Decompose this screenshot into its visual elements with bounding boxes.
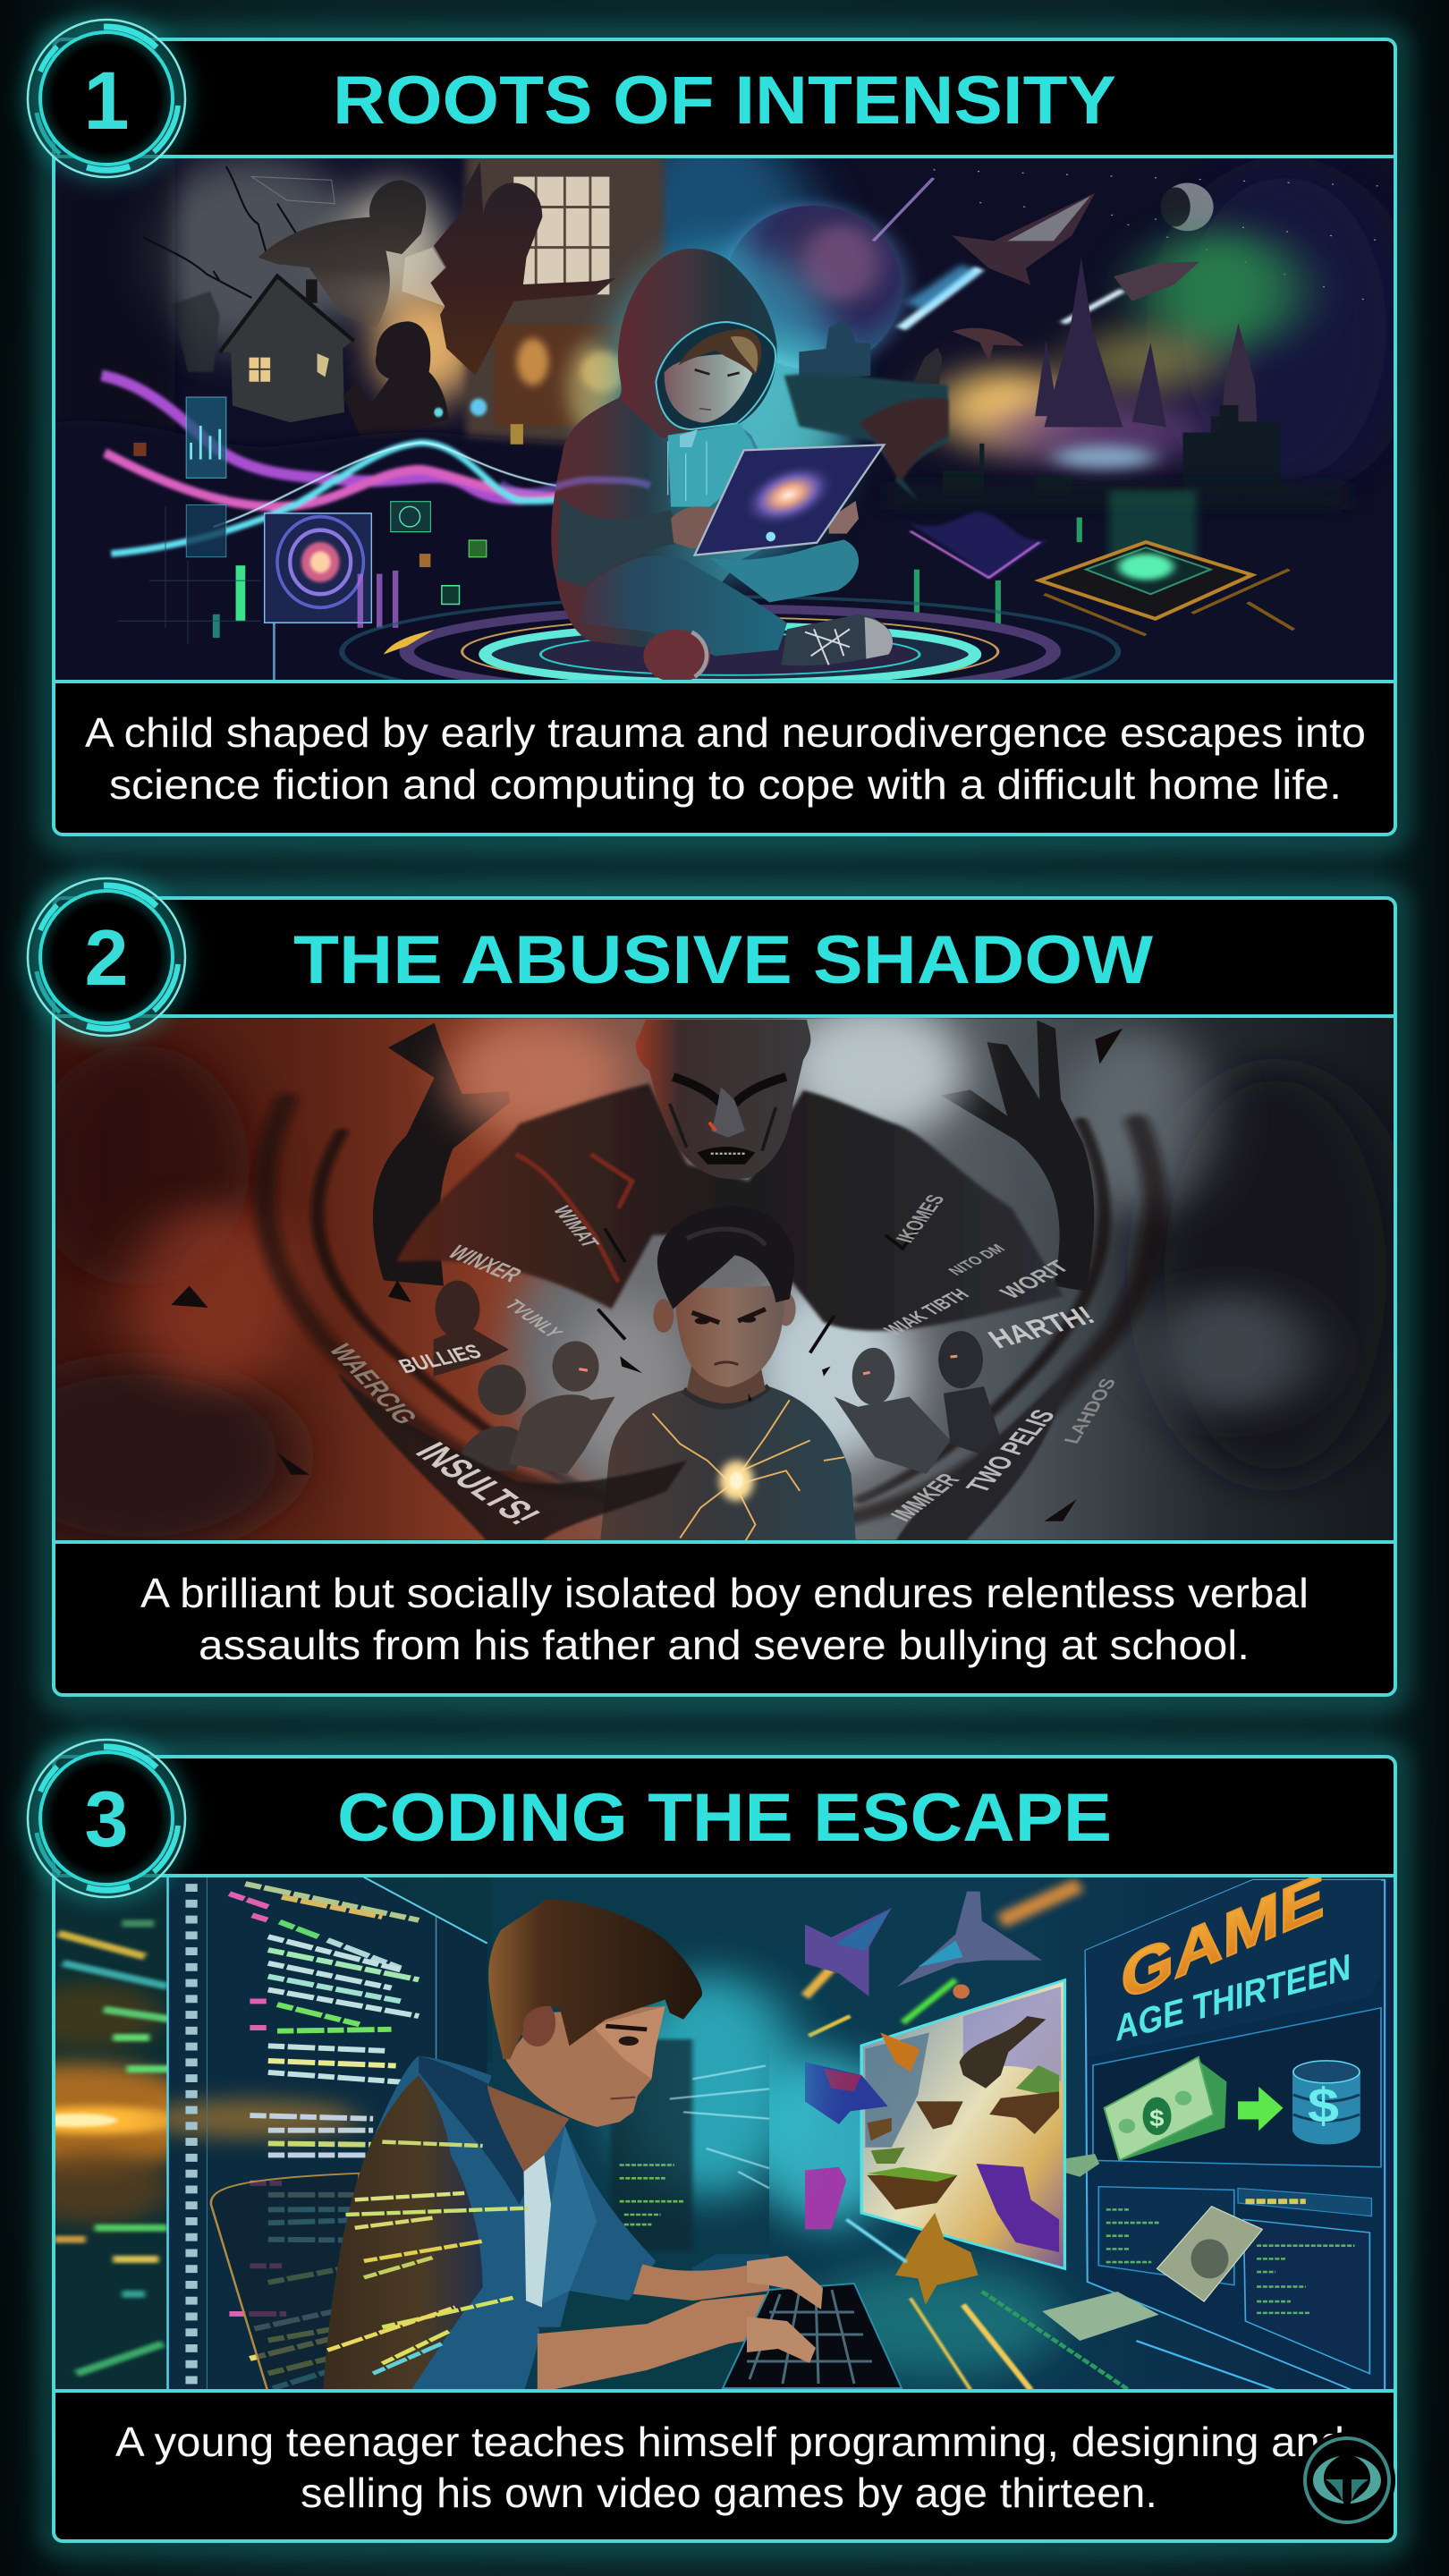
keyboard [723,2284,902,2388]
insult words: NITO DM [945,1241,1009,1278]
heading 3: CODING THE ESCAPE [337,1780,1112,1856]
heading 1: ROOTS OF INTENSITY [333,63,1116,139]
heading 2: THE ABUSIVE SHADOW [293,922,1153,998]
panel frame 1 [54,39,1395,835]
insult words: BULLIES [394,1340,486,1377]
caption box 3 [55,2391,1394,2539]
insult words: WAERCIG [321,1341,424,1428]
left light streaks [54,1874,170,2393]
insult words: WIAK TIBTH [879,1286,974,1339]
shadow swirl arcs [265,1099,1155,1521]
planet [721,204,906,370]
hair [488,1900,702,2059]
father face [636,1020,810,1179]
chair [211,2174,360,2393]
sleeve [557,495,680,588]
desk light streaks [846,2219,1284,2393]
debris [171,1029,1123,1521]
arrow [1238,2087,1284,2131]
panel 1: roots of intensity [24,16,1404,835]
floor rings [342,597,1118,707]
tablet [695,445,884,555]
number badge 1 [24,16,189,181]
face [665,354,758,423]
insult words: INSULTS! [406,1437,550,1530]
money stack [1105,2057,1226,2160]
neck [487,2086,570,2172]
text block 3 [115,2419,1344,2516]
game world and revenue panels: AGE THIRTEEN [1115,1945,1351,2049]
shadow band with insults [338,1373,687,1547]
exhaust streaks [1001,1885,1080,1921]
text block 1: A child shaped by early trauma and neurodivergence escapes into [85,709,1366,756]
sci-fi world on the right [591,121,1404,682]
father and boy figures [338,1003,1071,1547]
sci-fi city [943,258,1284,485]
insult words: IKOMES [890,1192,950,1245]
facial features [606,2026,647,2029]
hoodie [323,2055,656,2393]
text block 2: assaults from his father and severe bullying at school. [199,1622,1250,1668]
head [505,2006,665,2127]
game screen [861,1980,1064,2268]
icon: corner logo [1299,2432,1395,2529]
ships and creatures [805,1892,1042,2305]
illustration 1: child with tablet between trauma and sci-fi worlds [55,158,1394,680]
cracks glowing [653,1400,844,1547]
insult words: TWO PELIS [961,1407,1063,1496]
code reflected on the sleeve [327,2142,529,2374]
microchip [1039,490,1293,635]
insult words: WORIT [994,1256,1075,1302]
dark lower field [54,157,175,684]
code panel [140,1877,529,2393]
headline on the panel: GAME [1122,1859,1325,2015]
illustration 2: boy under towering shadow father with bullies [0,1003,1404,1548]
jeans [709,539,859,602]
trauma memories and holographic waves on the left [54,143,664,684]
insult words: HARTH! [982,1301,1101,1354]
text block 1 [85,709,1366,808]
insult words: TVUNLY [499,1297,568,1341]
number badge 3: 3 [85,1775,128,1863]
panel frame 3 [54,1757,1395,2541]
outer right panel [1086,1880,1385,2393]
insult words: LAHDOS [1059,1377,1120,1445]
insult words [321,1192,1120,1530]
number badge 2 [24,875,189,1039]
coin stack [1292,2061,1360,2144]
panel 2: the abusive shadow [0,875,1404,1695]
coin stack: $ [1308,2078,1339,2133]
mother silhouette [430,162,615,376]
number badge 1: 1 [83,55,130,147]
hood opening [656,322,775,429]
bullies [434,1281,1009,1474]
illustration 3: teen coding his own video game [0,1859,1394,2393]
header bar 3 [55,1758,1394,1876]
typing fingers [747,2256,823,2363]
desk [555,2287,769,2393]
code wall and teen at the keyboard [0,1874,802,2393]
boy with tablet [501,244,948,682]
hands [671,506,727,548]
text block 3: selling his own video games by age thirteen. [301,2470,1157,2516]
stars [934,170,1386,307]
claw hands [373,1023,510,1286]
holographic panels [117,397,523,682]
text block 1: science fiction and computing to cope with a difficult home life. [109,761,1342,808]
father silhouette [258,180,426,328]
number badge 2: 2 [85,913,128,1002]
caption box 1 [55,682,1394,833]
insult words: WINXER [442,1241,528,1286]
panel frame 2 [54,898,1395,1695]
text block 2: A brilliant but socially isolated boy endures relentless verbal [140,1570,1309,1616]
father body [396,1083,1063,1331]
text block 3: A young teenager teaches himself programming, designing and [115,2419,1344,2465]
shadow figures [172,292,220,372]
holo wave right [908,511,1048,580]
banknotes [1035,2154,1099,2177]
header bar 2 [55,900,1394,1015]
caption box 2 [55,1542,1394,1693]
shoes [781,614,893,665]
game world and revenue panels [752,1859,1385,2393]
hoodie [551,249,799,650]
money stack: $ [1149,2106,1165,2131]
city and floating island [784,322,948,501]
header bar 1 [55,41,1394,156]
panel 3: coding the escape [0,1736,1395,2541]
child silhouette [343,321,448,439]
glow wave across the sleeve [501,479,650,492]
insult words: WIMAT [547,1203,605,1250]
nebula and horizon glow [1141,230,1299,351]
moon [1161,182,1214,231]
text block 2 [140,1570,1309,1668]
boy [599,1206,856,1547]
hair [678,329,761,376]
arms [633,2261,769,2301]
cracks [143,166,296,298]
insult words: IMMKER [884,1470,966,1525]
house [220,276,354,422]
number badge 3 [24,1736,189,1901]
spaceships [873,178,1199,361]
energy waves [102,376,629,554]
